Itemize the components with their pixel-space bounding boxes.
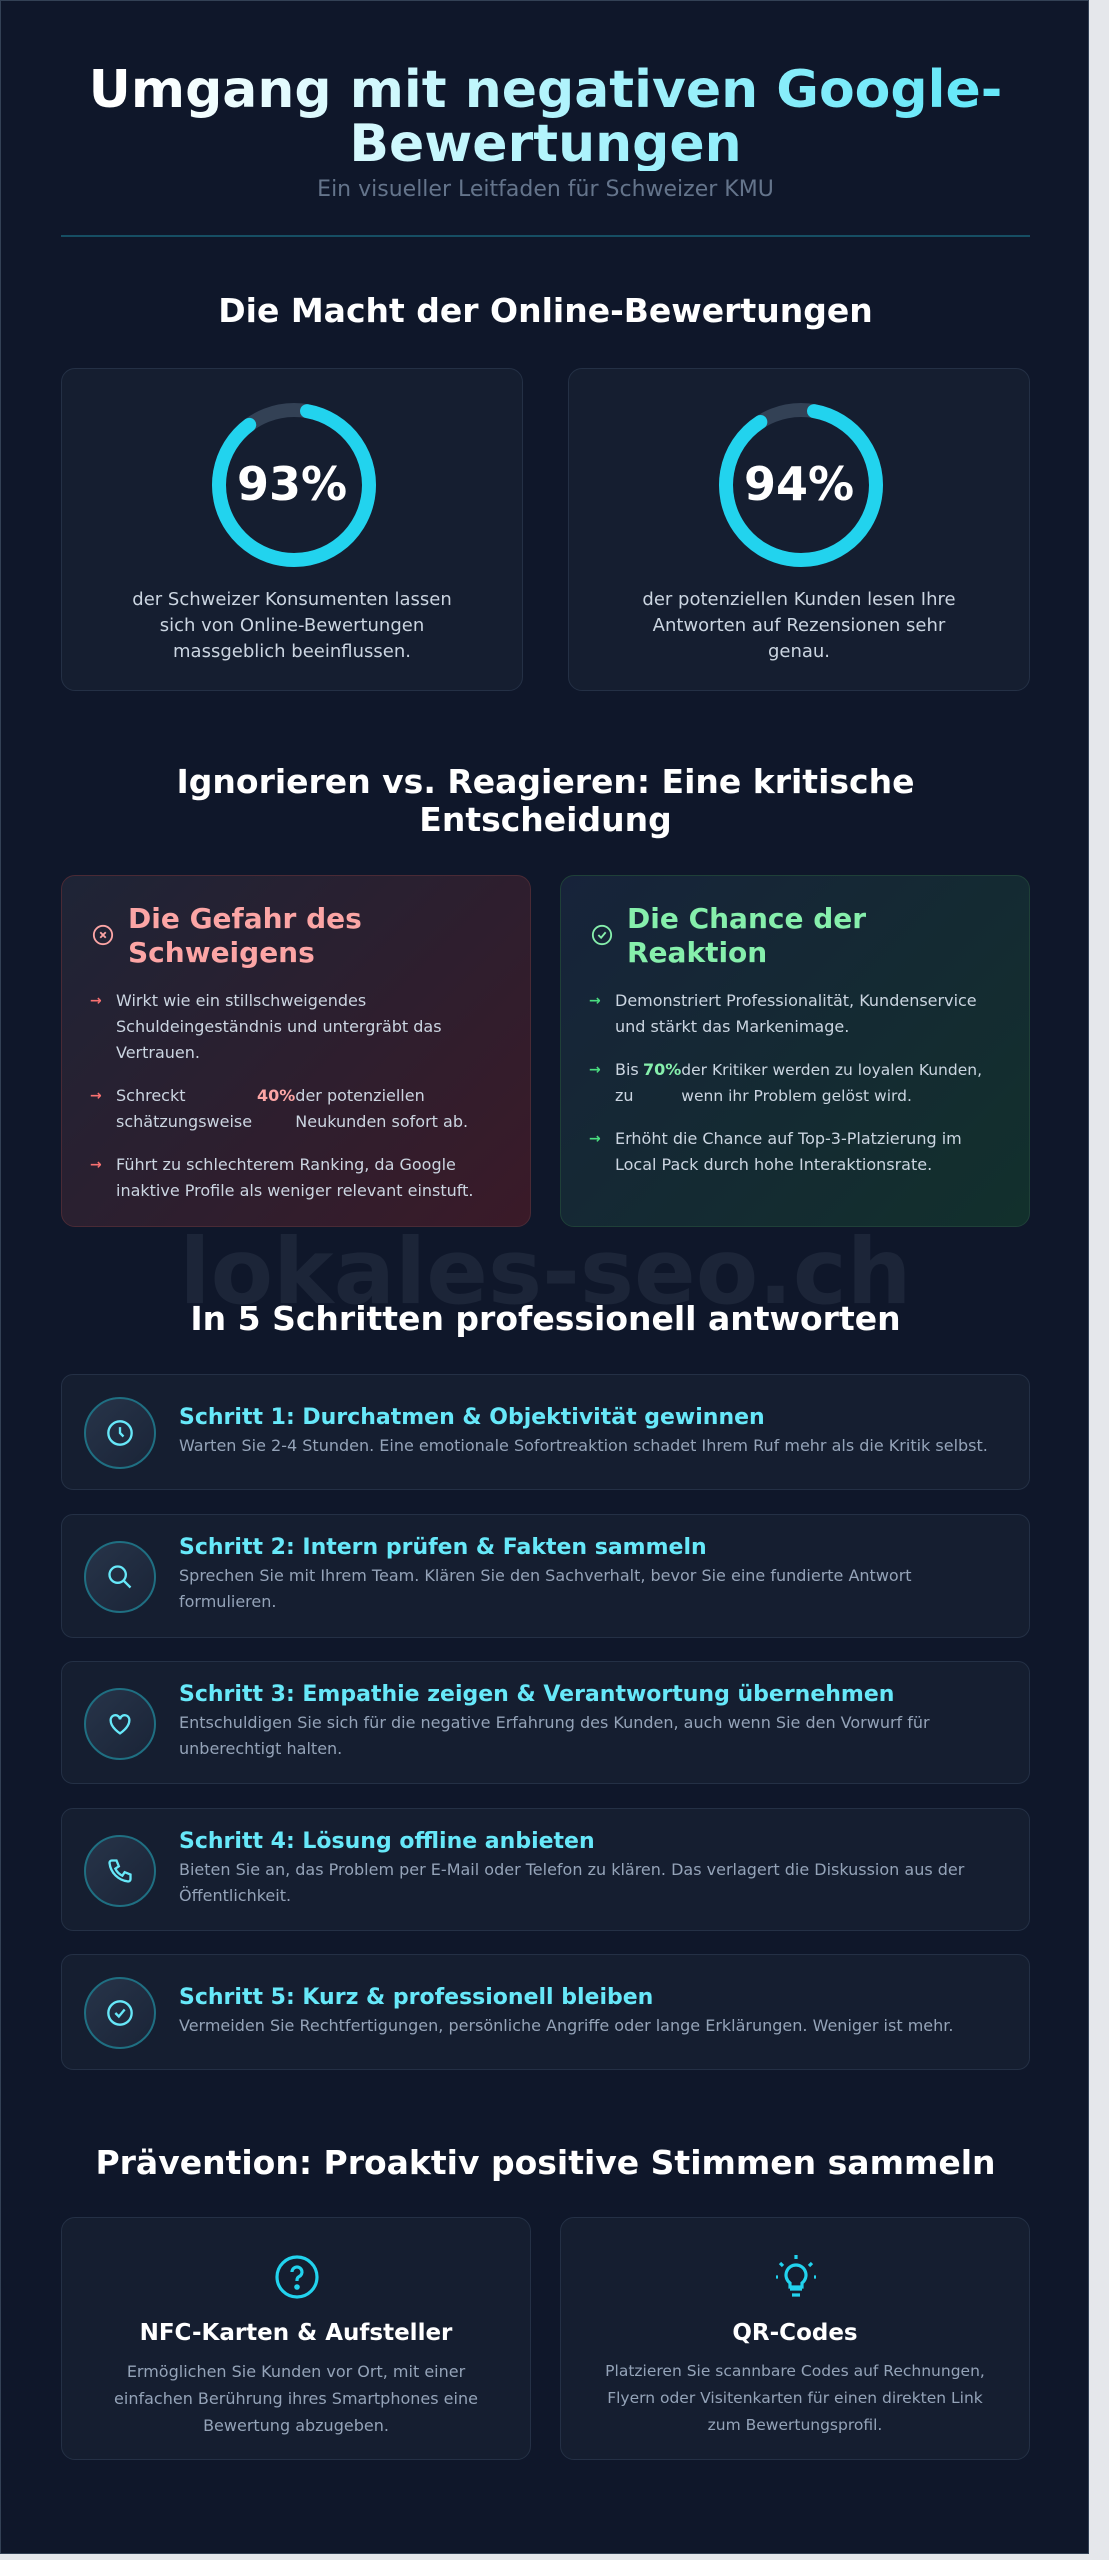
title: Umgang mit negativen Google- bbox=[89, 60, 1002, 120]
title bbox=[1, 63, 1090, 171]
card: QR: Platzieren Sie scannbare Codes auf Rechnungen, Flyern oder Visitenkarten für einen direkten Link zum Bewertungsprofil. bbox=[605, 2362, 985, 2434]
step 2: Schritt 2: Intern prüfen & Fakten sammeln bbox=[179, 1535, 707, 1560]
panel: danger bbox=[61, 875, 531, 1227]
caption: der Schweizer Konsumenten lassen sich von Online-Bewertungen massgeblich beeinflussen. bbox=[132, 589, 452, 662]
bullets: → bbox=[90, 1088, 102, 1104]
heading: Ignorieren vs Reagieren: Entscheidung bbox=[419, 800, 672, 839]
bullets: der Kritiker werden zu loyalen Kunden, wenn ihr Problem gelöst wird. bbox=[681, 1061, 982, 1105]
subtitle: Ein visueller Leitfaden für Schweizer KMU bbox=[317, 177, 774, 202]
heading: Ignorieren vs Reagieren bbox=[176, 762, 914, 839]
icon: check circle bbox=[592, 924, 612, 946]
bullets bbox=[90, 991, 473, 1200]
step 3 bbox=[61, 1661, 1030, 1784]
bullets bbox=[589, 991, 982, 1174]
card: QR bbox=[560, 2217, 1030, 2460]
bullets: → bbox=[90, 1157, 102, 1173]
title: Bewertungen bbox=[349, 114, 742, 174]
step 4: Bieten Sie an, das Problem per E-Mail oder Telefon zu klären. Das verlagert die Diskussion aus der Öffentlichkeit. bbox=[179, 1860, 964, 1905]
panel title: Die Chance der bbox=[627, 902, 866, 935]
bullets: 40% bbox=[257, 1086, 295, 1105]
panel: chance bbox=[560, 875, 1030, 1227]
step 5 bbox=[61, 1954, 1030, 2070]
icon: check bbox=[84, 1977, 156, 2049]
stat card 93 bbox=[61, 368, 523, 691]
card: NFC bbox=[61, 2217, 531, 2460]
step 1 bbox=[61, 1374, 1030, 1490]
panel title bbox=[627, 902, 866, 969]
heading: Macht: Die Macht der Online-Bewertungen bbox=[218, 291, 873, 330]
step 5: Schritt 5: Kurz & professionell bleiben bbox=[179, 1985, 653, 2010]
bullets: der potenziellen Neukunden sofort ab. bbox=[295, 1086, 468, 1131]
bullets: Führt zu schlechterem Ranking, da Google inaktive Profile als weniger relevant einstuft. bbox=[116, 1155, 473, 1200]
bullets: → bbox=[589, 1062, 601, 1078]
bullets: Bis zu bbox=[615, 1060, 639, 1105]
watermark: lokales-seo.ch bbox=[179, 1220, 912, 1325]
stat card 94 bbox=[568, 368, 1030, 691]
panel title: Die Gefahr des bbox=[128, 902, 362, 935]
icon: heart bbox=[84, 1688, 156, 1760]
bullets: Erhöht die Chance auf Top-3-Platzierung im Local Pack durch hohe Interaktionsrate. bbox=[615, 1129, 962, 1174]
panel title bbox=[128, 902, 362, 969]
step 4: Schritt 4: Lösung offline anbieten bbox=[179, 1829, 595, 1854]
icon: clock bbox=[84, 1397, 156, 1469]
value: 93% bbox=[237, 457, 347, 511]
heading: Ignorieren vs Reagieren: Ignorieren vs. Reagieren: Eine kritische bbox=[176, 762, 914, 801]
heading: Prävention: Prävention: Proaktiv positive Stimmen sammeln bbox=[95, 2143, 996, 2182]
icon: search bbox=[84, 1541, 156, 1613]
step 2 bbox=[61, 1514, 1030, 1638]
ring 94 bbox=[719, 403, 883, 567]
icon: phone bbox=[84, 1835, 156, 1907]
heading: 5 Schritte: In 5 Schritten professionell antworten bbox=[190, 1299, 901, 1338]
icon: x circle bbox=[92, 924, 114, 946]
bullets: Demonstriert Professionalität, Kundenservice und stärkt das Markenimage. bbox=[615, 991, 977, 1036]
step 4 bbox=[61, 1808, 1030, 1931]
ring 93 bbox=[212, 403, 376, 567]
panel title: Schweigens bbox=[128, 936, 315, 969]
step 1: Schritt 1: Durchatmen & Objektivität gewinnen bbox=[179, 1405, 765, 1430]
step 3: Entschuldigen Sie sich für die negative Erfahrung des Kunden, auch wenn Sie den Vorwurf für unberechtigt halten. bbox=[179, 1713, 930, 1758]
panel title: Reaktion bbox=[627, 936, 767, 969]
bullets: → bbox=[90, 993, 102, 1009]
card: NFC: NFC-Karten & Aufsteller bbox=[140, 2320, 452, 2346]
step 1: Warten Sie 2-4 Stunden. Eine emotionale Sofortreaktion schadet Ihrem Ruf mehr als die Kritik selbst. bbox=[179, 1436, 988, 1455]
bullets: Wirkt wie ein stillschweigendes Schuldeingeständnis und untergräbt das Vertrauen. bbox=[116, 991, 442, 1062]
card: QR: QR-Codes bbox=[732, 2320, 858, 2346]
value: 94% bbox=[744, 457, 854, 511]
icon: bulb bbox=[776, 2255, 816, 2297]
step 2: Sprechen Sie mit Ihrem Team. Klären Sie den Sachverhalt, bevor Sie eine fundierte Antwort formulieren. bbox=[179, 1566, 912, 1611]
bullets: 70% bbox=[643, 1060, 681, 1079]
bullets: → bbox=[589, 993, 601, 1009]
bullets: Schreckt schätzungsweise bbox=[116, 1086, 252, 1131]
step 3: Schritt 3: Empathie zeigen & Verantwortung übernehmen bbox=[179, 1682, 894, 1707]
caption: der potenziellen Kunden lesen Ihre Antworten auf Rezensionen sehr genau. bbox=[642, 589, 956, 662]
card: NFC: Ermöglichen Sie Kunden vor Ort, mit einer einfachen Berührung ihres Smartphones eine Bewertung abzugeben. bbox=[114, 2362, 478, 2435]
bullets: → bbox=[589, 1131, 601, 1147]
step 5: Vermeiden Sie Rechtfertigungen, persönliche Angriffe oder lange Erklärungen. Weniger ist mehr. bbox=[179, 2016, 953, 2035]
icon: question bbox=[275, 2255, 319, 2299]
